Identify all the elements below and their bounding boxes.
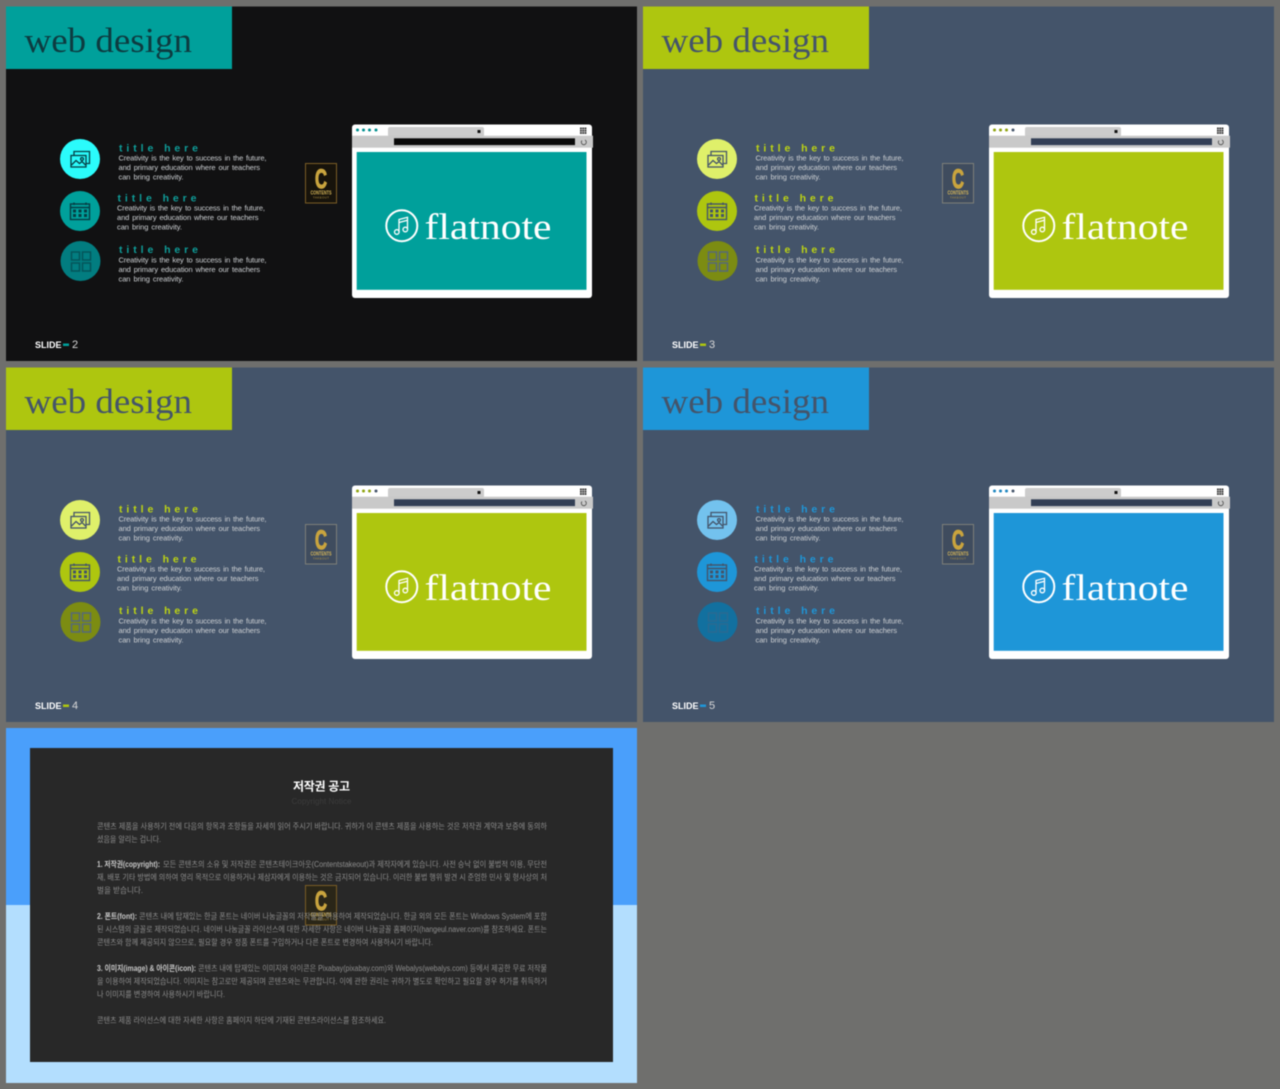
item 1: title here <box>119 504 198 516</box>
notice body text: 3. 이미지(image) & 아이콘(icon): <box>97 963 196 973</box>
notice body text: 콘텐츠 제품 라이선스에 대한 자세한 사항은 홈페이지 하단에 기재된 콘텐츠라이선스를 참조하세요. <box>97 1015 386 1025</box>
item 2: and primary education where our teachers <box>117 213 259 222</box>
slide number: 5 <box>709 700 715 712</box>
logo badge: TAKEOUT <box>950 556 966 560</box>
item 3: can bring creativity. <box>756 636 820 644</box>
browser window <box>352 486 593 659</box>
item 1: and primary education where our teachers <box>756 163 897 172</box>
logo badge: C <box>952 164 964 194</box>
logo badge: TAKEOUT <box>313 196 329 200</box>
browser window <box>989 486 1230 659</box>
logo badge: CONTENTS <box>310 552 332 558</box>
slide number <box>672 339 715 351</box>
item 1 <box>60 139 266 182</box>
item 2 <box>697 191 902 232</box>
slide number: SLIDE <box>672 340 698 351</box>
item 2: and primary education where our teachers <box>754 574 896 583</box>
logo badge: C <box>315 164 327 194</box>
flatnote logo <box>1023 568 1188 609</box>
item 2 <box>60 552 265 592</box>
item 2: title here <box>754 554 834 566</box>
item 2: Creativity is the key to success in the future, <box>117 204 265 212</box>
item 3: Creativity is the key to success in the future, <box>118 616 266 626</box>
item 2: can bring creativity. <box>117 584 182 592</box>
item 3: title here <box>756 605 835 617</box>
notice body text: 벌을 받습니다. <box>97 885 143 895</box>
item 2: title here <box>118 192 197 204</box>
header band: web design <box>24 21 192 60</box>
notice heading <box>292 778 352 806</box>
item 2: can bring creativity. <box>754 222 819 232</box>
item 1: and primary education where our teachers <box>756 524 897 533</box>
slide number: SLIDE <box>35 340 62 351</box>
logo badge: CONTENTS <box>948 552 969 558</box>
logo badge <box>306 164 336 203</box>
notice body text: 콘텐츠 제품을 사용하기 전에 다음의 항목과 조항들을 자세히 읽어 주시기 바랍니다. 귀하가 이 콘텐츠 제품을 사용하는 것은 저작권 계약과 보증에 동의하 <box>97 821 548 831</box>
item 2: can bring creativity. <box>754 584 819 592</box>
notice body text: 콘텐츠와 함께 제공되지 않으므로, 필요할 경우 정품 폰트를 구입하거나 다른 폰트로 변경하여 사용하시기 바랍니다. <box>97 937 433 947</box>
item 1 <box>60 500 266 542</box>
slide 3: lime on slate <box>643 6 1274 361</box>
item 2 <box>60 191 265 232</box>
slide number: 4 <box>72 700 78 712</box>
notice body text <box>97 821 548 1025</box>
item 1: title here <box>119 142 198 154</box>
item 3: and primary education where our teachers <box>756 265 897 274</box>
item 2: can bring creativity. <box>117 222 182 232</box>
notice body text: 재, 배포 기타 방법에 의하여 영리 목적으로 이용하거나 제삼자에게 이용하는 것은 금지되어 있습니다. 이러한 불법 행위 발견 시 준엄한 민사 및 형사상의 처 <box>97 872 547 882</box>
notice body text: 셨음을 알리는 겁니다. <box>97 834 161 844</box>
slide number: 3 <box>709 339 715 351</box>
logo badge: C <box>315 525 327 555</box>
slide number: 2 <box>72 339 78 351</box>
item 2: title here <box>754 192 834 204</box>
notice body text: 1. 저작권(copyright): <box>97 859 160 869</box>
flatnote logo: flatnote <box>1062 568 1188 609</box>
header band: web design <box>662 21 829 60</box>
slide number <box>35 700 78 712</box>
slide number: SLIDE <box>672 701 698 712</box>
item 3: can bring creativity. <box>756 274 820 284</box>
browser window <box>989 124 1230 298</box>
item 1: can bring creativity. <box>756 172 820 182</box>
flatnote logo: flatnote <box>1062 207 1188 248</box>
item 1: Creativity is the key to success in the future, <box>118 514 266 524</box>
logo badge <box>306 524 336 564</box>
item 1: Creativity is the key to success in the future, <box>118 154 266 162</box>
slide 4: lime on slate <box>6 368 637 722</box>
item 3: Creativity is the key to success in the future, <box>756 616 904 626</box>
item 2: Creativity is the key to success in the future, <box>754 564 902 574</box>
item 3: and primary education where our teachers <box>118 265 260 274</box>
item 2: Creativity is the key to success in the future, <box>754 204 902 212</box>
item 1 <box>697 500 904 542</box>
item 3 <box>698 602 904 644</box>
item 2: Creativity is the key to success in the future, <box>117 564 265 574</box>
flatnote logo <box>386 207 552 248</box>
item 3: title here <box>119 244 198 256</box>
item 3: title here <box>119 605 198 617</box>
logo badge <box>942 524 974 564</box>
logo badge <box>942 164 974 203</box>
logo badge <box>306 886 336 925</box>
slide 2: teal on black <box>6 6 637 361</box>
logo badge: C <box>952 525 964 555</box>
notice body text: 콘텐츠 내에 탑재있는 한글 폰트는 네이버 나눔글꼴의 저작물을 이용하여 제작되었습니다. 한글 외의 모든 폰트는 Windows System에 포함 <box>139 911 548 921</box>
notice heading: 저작권 공고 <box>293 778 350 794</box>
header band <box>6 368 232 430</box>
item 1: Creativity is the key to success in the future, <box>756 514 904 524</box>
logo badge: C <box>315 886 327 916</box>
notice body text: 콘텐츠 내에 탑재있는 이미지와 아이콘은 Pixabay(pixabay.com)와 Webalys(webalys.com) 등에서 제공한 무료 저작물 <box>198 963 547 973</box>
slide 5: blue on slate <box>643 368 1274 722</box>
logo badge: TAKEOUT <box>313 918 329 922</box>
notice body text: 모든 콘텐츠의 소유 및 저작권은 콘텐츠테이크아웃(Contentstakeout)과 제작자에게 있습니다. 사전 승낙 없이 불법적 이용, 무단전 <box>163 859 547 869</box>
item 3: Creativity is the key to success in the future, <box>756 256 904 264</box>
item 3: Creativity is the key to success in the future, <box>118 256 266 264</box>
header band: web design <box>24 382 192 421</box>
notice body text: 나 이미지를 변경하여 사용하시기 바랍니다. <box>97 989 225 999</box>
item 3 <box>60 602 266 644</box>
item 1: and primary education where our teachers <box>118 163 260 172</box>
item 1: and primary education where our teachers <box>118 524 260 533</box>
item 3 <box>698 241 904 284</box>
notice body text: 된 시스템의 글꼴로 제작되었습니다. 네이버 나눔글꼴 라이선스에 대한 자세한 사항은 네이버 나눔글꼴 홈페이지(hangeul.naver.com)를 참조하세요. 폰트는 <box>97 924 547 934</box>
logo badge: CONTENTS <box>948 190 969 196</box>
flatnote logo: flatnote <box>424 568 552 609</box>
notice body text: 2. 폰트(font): <box>97 912 137 921</box>
flatnote logo: flatnote <box>424 207 552 248</box>
flatnote logo <box>1023 207 1188 248</box>
item 1: title here <box>756 142 835 154</box>
slide number <box>35 339 78 351</box>
logo badge: CONTENTS <box>310 190 332 196</box>
item 1: Creativity is the key to success in the future, <box>756 154 904 162</box>
item 2 <box>697 552 902 592</box>
flatnote logo <box>386 568 552 609</box>
logo badge: TAKEOUT <box>950 196 966 200</box>
slide number: SLIDE <box>35 701 62 712</box>
item 3: title here <box>756 244 835 256</box>
copyright notice slide <box>6 728 637 1083</box>
logo badge: CONTENTS <box>310 912 332 918</box>
header band <box>6 6 232 69</box>
item 1: can bring creativity. <box>756 534 820 542</box>
header band <box>643 6 869 69</box>
header band <box>643 368 869 430</box>
slide number <box>672 700 715 712</box>
notice heading: Copyright Notice <box>292 797 352 806</box>
notice body text: 을 이용하여 제작되었습니다. 이미지는 참고로만 제공되며 콘텐츠와는 무관합니다. 이에 관한 권리는 귀하가 별도로 확인하고 필요할 경우 허가를 취득하거 <box>97 976 547 986</box>
item 3: and primary education where our teachers <box>118 626 260 635</box>
browser window <box>352 124 593 298</box>
header band: web design <box>662 382 829 421</box>
item 3 <box>60 241 266 284</box>
item 3: and primary education where our teachers <box>756 626 897 635</box>
item 3: can bring creativity. <box>118 274 184 284</box>
item 1: title here <box>756 504 835 516</box>
item 1 <box>697 139 904 182</box>
item 2: and primary education where our teachers <box>117 574 259 583</box>
logo badge: TAKEOUT <box>313 556 329 560</box>
item 2: title here <box>118 554 197 566</box>
item 2: and primary education where our teachers <box>754 213 896 222</box>
item 1: can bring creativity. <box>118 534 184 542</box>
item 1: can bring creativity. <box>118 172 184 182</box>
item 3: can bring creativity. <box>118 636 184 644</box>
